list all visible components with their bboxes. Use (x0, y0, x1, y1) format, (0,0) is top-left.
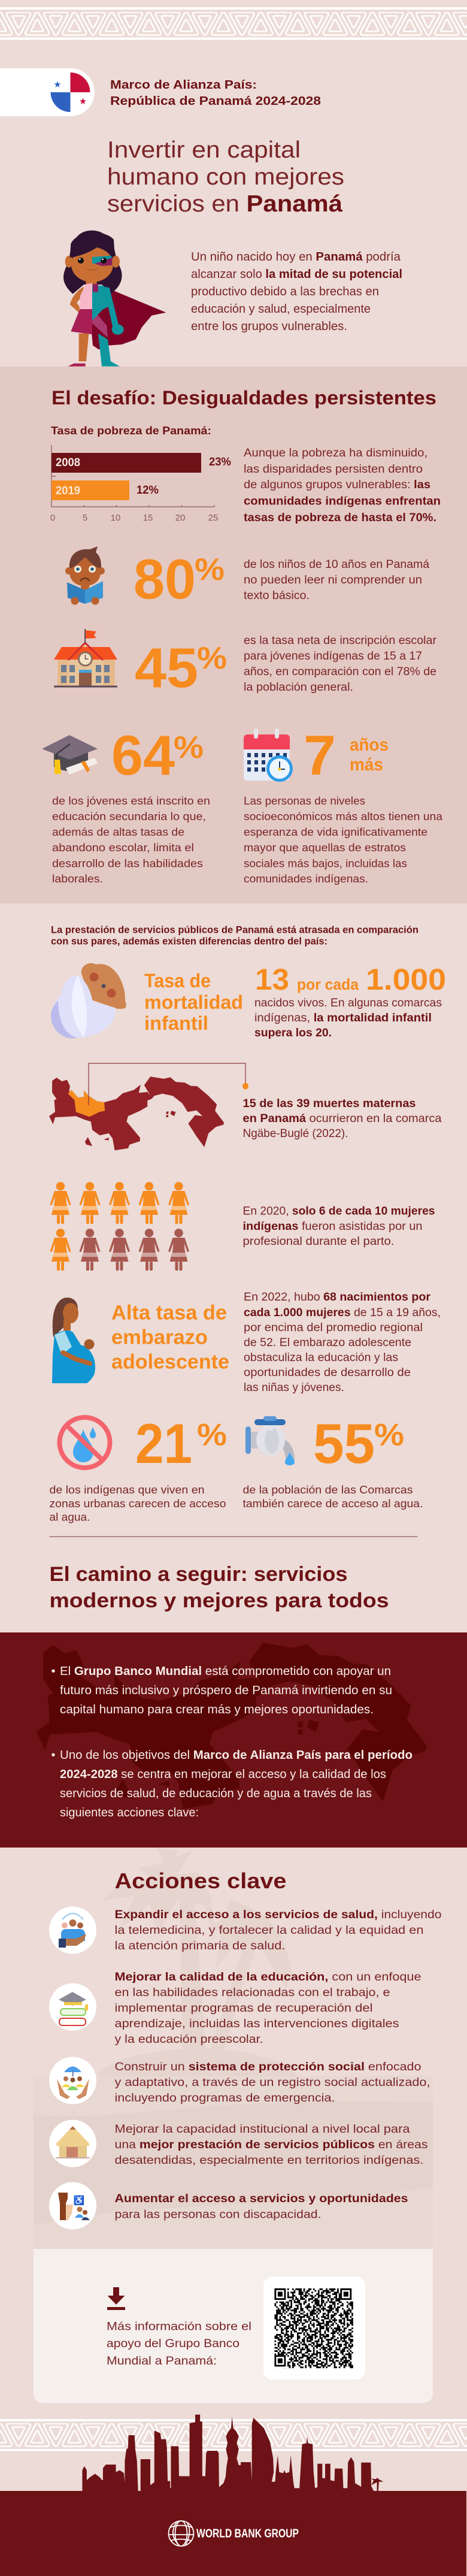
text: maternal deaths (243, 1097, 442, 1140)
text: maternal deaths: 15 de las 39 muertes maternas (243, 1097, 416, 1110)
text: infant mortality: nacidos vivos. En algunas comarcas (254, 997, 442, 1009)
text: 64%: además de altas tasas de (52, 826, 184, 838)
text: public services: desatendidas, especialmente en territorios indígenas. (115, 2154, 424, 2167)
stat: 80% (134, 548, 225, 610)
bar chart: poverty rate: 10 (111, 513, 120, 523)
heading: public services lag (51, 925, 419, 947)
heading: way forward: modernos y mejores para todos (49, 1589, 389, 1612)
text: assisted births: indígenas fueron asistidas por un (243, 1220, 423, 1233)
text: 64%: abandono escolar, limita el (52, 841, 194, 854)
panel: World Bank commitment: 2024-2028 se centra en mejorar el acceso y la calidad de los (60, 1768, 386, 1781)
text: 45%: años, en comparación con el 78% de (244, 666, 436, 678)
background: public services section (0, 903, 467, 2576)
text: education: implementar programas de recuperación del (115, 2002, 372, 2015)
watermark: palm trees and island (95, 1848, 301, 2118)
stat: 21% (135, 1412, 227, 1475)
bar chart: poverty rate: 2019 (56, 485, 80, 497)
stat: 45%: % (197, 641, 227, 676)
icon: Panama flag pill: ★ (79, 96, 87, 107)
text: education: y la educación preescolar. (115, 2033, 263, 2046)
text: teen pregnancy: de 52. El embarazo adolescente (244, 1337, 411, 1349)
text: infant mortality: indígenas, la mortalidad infantil (254, 1012, 432, 1024)
text: social protection: incluyendo programas de emergencia. (115, 2092, 335, 2105)
heading: public services lag: con sus pares, además existen diferencias dentro del país: (51, 936, 327, 947)
stat: 64% (111, 724, 204, 787)
stat: 21%: % (197, 1417, 227, 1452)
logo: World Bank Group (169, 2521, 299, 2546)
text: 64%: laborales. (52, 872, 103, 885)
stat: 13 per 1,000: 13 (255, 963, 289, 996)
bar chart: poverty rate: 0 (50, 513, 55, 523)
text: 64%: desarrollo de las habilidades (52, 857, 203, 870)
header text: República de Panamá 2024-2028 (110, 94, 321, 108)
text: 80%: texto básico. (244, 589, 310, 602)
text: more info: apoyo del Grupo Banco (107, 2338, 239, 2350)
text: poverty: las disparidades persisten dentro (244, 463, 423, 476)
text: 21% (49, 1484, 226, 1523)
icon: disability inclusion: ♿ (74, 2195, 84, 2206)
stat: 45%: 45 (135, 636, 198, 699)
icon: Panama flag pill (0, 68, 95, 116)
stat: 55%: % (374, 1417, 404, 1452)
bar chart: poverty rate: 5 (83, 513, 87, 523)
stat: 7 años más: 7 (304, 724, 336, 787)
text: education: aprendizaje, incluidas las intervenciones digitales (115, 2018, 399, 2030)
text: infant mortality (254, 997, 442, 1039)
text: 80%: no pueden leer ni comprender un (244, 574, 422, 586)
text: public services: Mejorar la capacidad institucional a nivel local para (115, 2123, 410, 2136)
heading: teen pregnancy: Alta tasa de (111, 1301, 227, 1324)
background: intro section (0, 0, 467, 367)
text: assisted births: En 2020, solo 6 de cada 10 mujeres (243, 1205, 435, 1217)
icon: social protection (49, 2057, 96, 2104)
text: teen pregnancy: En 2022, hubo 68 nacimientos por (244, 1291, 431, 1304)
stat: 13 per 1,000: 1.000 (366, 963, 446, 996)
panel: World Bank commitment: • (51, 1665, 56, 1678)
stat: 21%: 21 (135, 1412, 192, 1475)
text: assisted births: profesional durante el parto. (243, 1235, 394, 1248)
stat: 13 per 1,000: por cada (297, 975, 359, 993)
panel: World Bank commitment: futuro más inclusivo y próspero de Panamá invirtiendo en su (60, 1684, 392, 1697)
panel: World Bank commitment: siguientes acciones clave: (60, 1806, 199, 1819)
heading: infant mortality: mortalidad (144, 991, 243, 1013)
heading: way forward: El camino a seguir: servicios (49, 1563, 347, 1586)
text: 64%: de los jóvenes está inscrito en (52, 794, 210, 807)
title: servicios en Panamá (107, 191, 342, 217)
text: 80% (244, 558, 429, 602)
icon: boy reading (65, 546, 105, 605)
bar chart: poverty rate: 15 (143, 513, 153, 523)
text: teen pregnancy: las niñas y jóvenes. (244, 1381, 344, 1394)
text: poverty: de algunos grupos vulnerables: las (244, 479, 430, 491)
panel: wavy backdrop (34, 2076, 433, 2249)
panel: World Bank commitment: Uno de los objetivos del Marco de Alianza País para el período (60, 1749, 413, 1762)
text: 21%: de los indígenas que viven en (49, 1484, 205, 1496)
text: teen pregnancy: cada 1.000 mujeres de 15 a 19 años, (244, 1307, 441, 1319)
stat: 55% (313, 1412, 404, 1475)
text: 7 años más: mayor que aquellas de estratos (244, 841, 406, 854)
intro paragraph: alcanzar solo la mitad de su potencial (191, 268, 402, 281)
title: humano con mejores (107, 164, 344, 190)
pictogram: 6 of 10 women (50, 1182, 189, 1271)
panel: more information (34, 2249, 433, 2403)
text: 55%: también carece de acceso al agua. (243, 1498, 423, 1510)
text: 7 años más: sociales más bajos, incluidas las (244, 857, 407, 870)
text: social protection: y adaptativo, a través de un registro social actualizado, (115, 2076, 430, 2089)
icon: faucet (245, 1416, 295, 1465)
stat: 80%: % (195, 552, 225, 587)
text: disability (115, 2193, 408, 2221)
stat: 80%: 80 (134, 548, 196, 610)
icon: no water (60, 1417, 110, 1468)
intro paragraph (191, 250, 402, 333)
text: social protection (115, 2061, 430, 2105)
text: 55%: de la población de las Comarcas (243, 1484, 413, 1496)
text: 7 años más: comunidades indígenas. (244, 872, 368, 885)
text: 7 años más: socioeconómicos más altos tienen una (244, 810, 443, 823)
text: education: Mejorar la calidad de la educación, con un enfoque (115, 1971, 421, 1984)
panel: World Bank commitment: servicios de salud, de educación y de agua a través de las (60, 1787, 372, 1800)
heading: infant mortality: infantil (144, 1012, 208, 1034)
text: teen pregnancy (244, 1291, 441, 1394)
panel: World Bank commitment: El Grupo Banco Mundial está comprometido con apoyar un (60, 1665, 391, 1678)
text: 21%: al agua. (49, 1511, 90, 1523)
icon: education (49, 1983, 96, 2031)
text: assisted births (243, 1205, 435, 1248)
stat: 7 años más: más (350, 755, 383, 775)
icon: disability inclusion (49, 2182, 96, 2230)
bar chart: poverty rate: 25 (208, 513, 218, 523)
text: 55% (243, 1484, 423, 1510)
text: 64%: educación secundaria lo que, (52, 810, 206, 823)
text: teen pregnancy: por encima del promedio regional (244, 1322, 423, 1334)
text: 7 años más: esperanza de vida ignificativamente (244, 826, 427, 838)
text: 64% (52, 794, 210, 885)
stat: 7 años más (304, 724, 389, 787)
skyline (82, 2415, 383, 2492)
text: 45%: la población general. (244, 681, 353, 694)
text: teen pregnancy: oportunidades de desarrollo de (244, 1366, 411, 1379)
icon: swaddled baby (51, 963, 126, 1038)
heading: teen pregnancy: embarazo (111, 1326, 208, 1349)
icon: hut (49, 2120, 96, 2167)
text: education (115, 1971, 421, 2046)
text: more info: Mundial a Panamá: (107, 2355, 217, 2368)
text: education: en las habilidades relacionadas con el trabajo, e (115, 1987, 390, 1999)
header text: Marco de Alianza País: (110, 78, 257, 92)
icon: Panama flag pill: ★ (53, 80, 62, 90)
heading: teen pregnancy (111, 1301, 229, 1373)
QR code (263, 2276, 365, 2380)
text: 45%: es la tasa neta de inscripción escolar (244, 634, 437, 647)
text: poverty: comunidades indígenas enfrentan (244, 495, 441, 508)
heading: infant mortality (144, 970, 243, 1034)
text: health: Expandir el acceso a los servicios de salud, incluyendo (115, 1909, 441, 1921)
heading: way forward (49, 1563, 389, 1612)
bottom decorative band (0, 2419, 467, 2451)
map watermark (37, 1643, 427, 1809)
text: more info: Más información sobre el (107, 2321, 251, 2333)
heading: public services lag: La prestación de servicios públicos de Panamá está atrasada en comparación (51, 925, 419, 936)
panel: World Bank commitment (0, 1632, 467, 1848)
bar chart: poverty rate: 12% (137, 484, 159, 497)
text: infant mortality: supera los 20. (254, 1027, 332, 1039)
logo: World Bank Group: WORLD BANK GROUP (196, 2527, 299, 2540)
text: teen pregnancy: obstaculiza la educación y las (244, 1352, 398, 1364)
heading: key actions: Acciones clave (115, 1868, 286, 1893)
panel: World Bank commitment: capital humano para crear más y mejores oportunidades. (60, 1703, 374, 1716)
bar chart: poverty rate: 23% (209, 456, 231, 468)
bar chart: poverty rate (50, 445, 231, 523)
icon: health access (49, 1906, 96, 1954)
heading: infant mortality: Tasa de (144, 970, 211, 991)
icon: calendar with clock (244, 728, 293, 782)
background: challenge section (0, 367, 467, 903)
icon: pregnant teen (52, 1298, 95, 1383)
intro paragraph: entre los grupos vulnerables. (191, 320, 347, 333)
text: 21%: zonas urbanas carecen de acceso (49, 1498, 226, 1510)
map: Panama (49, 1063, 248, 1150)
text: 7 años más: Las personas de niveles (244, 794, 365, 807)
text: 80%: de los niños de 10 años en Panamá (244, 558, 429, 571)
top decorative band (0, 7, 467, 40)
text: health (115, 1909, 441, 1952)
panel: World Bank commitment: • (51, 1749, 56, 1762)
text: 45%: para jóvenes indígenas de 15 a 17 (244, 650, 422, 663)
heading: challenge: El desafío: Desigualdades persistentes (51, 387, 436, 409)
text: maternal deaths: en Panamá ocurrieron en la comarca (243, 1112, 442, 1125)
title (107, 137, 344, 217)
stat: 64%: % (174, 730, 204, 765)
heading: poverty chart: Tasa de pobreza de Panamá: (51, 424, 211, 437)
text: public services: una mejor prestación de servicios públicos en áreas (115, 2139, 427, 2151)
text: disability: Aumentar el acceso a servicios y oportunidades (115, 2193, 408, 2205)
bar chart: poverty rate: 2008 (56, 456, 80, 469)
text: more info (107, 2321, 251, 2368)
text: 7 años más (244, 794, 443, 885)
stat: 13 per 1,000 (255, 963, 446, 996)
text: disability: para las personas con discapacidad. (115, 2208, 321, 2221)
header text (110, 78, 321, 108)
illustration: superhero girl (63, 231, 166, 367)
stat: 7 años más: años (350, 735, 389, 755)
footer (0, 2491, 466, 2576)
text: maternal deaths: Ngäbe-Buglé (2022). (243, 1127, 348, 1140)
intro paragraph: educación y salud, especialmente (191, 303, 371, 316)
stat: 64%: 64 (111, 724, 175, 787)
text: public services (115, 2123, 427, 2167)
text: poverty: tasas de pobreza de hasta el 70%. (244, 512, 436, 524)
text: poverty: Aunque la pobreza ha disminuido, (244, 447, 427, 459)
stat: 55%: 55 (313, 1412, 375, 1475)
bar chart: poverty rate: 20 (175, 513, 185, 523)
text: 45% (244, 634, 437, 694)
heading: teen pregnancy: adolescente (111, 1350, 229, 1373)
intro paragraph: productivo debido a las brechas en (191, 285, 379, 298)
stat: 45% (135, 636, 227, 699)
text: poverty (244, 447, 441, 524)
intro paragraph: Un niño nacido hoy en Panamá podría (191, 250, 401, 264)
icon: graduation cap (42, 735, 98, 775)
text: social protection: Construir un sistema de protección social enfocado (115, 2061, 421, 2073)
text: health: la telemedicina, y fortalecer la calidad y la equidad en (115, 1924, 424, 1937)
icon: download (107, 2287, 125, 2310)
title: Invertir en capital (107, 137, 301, 163)
icon: school (54, 629, 117, 688)
text: health: la atención primaria de salud. (115, 1940, 285, 1952)
